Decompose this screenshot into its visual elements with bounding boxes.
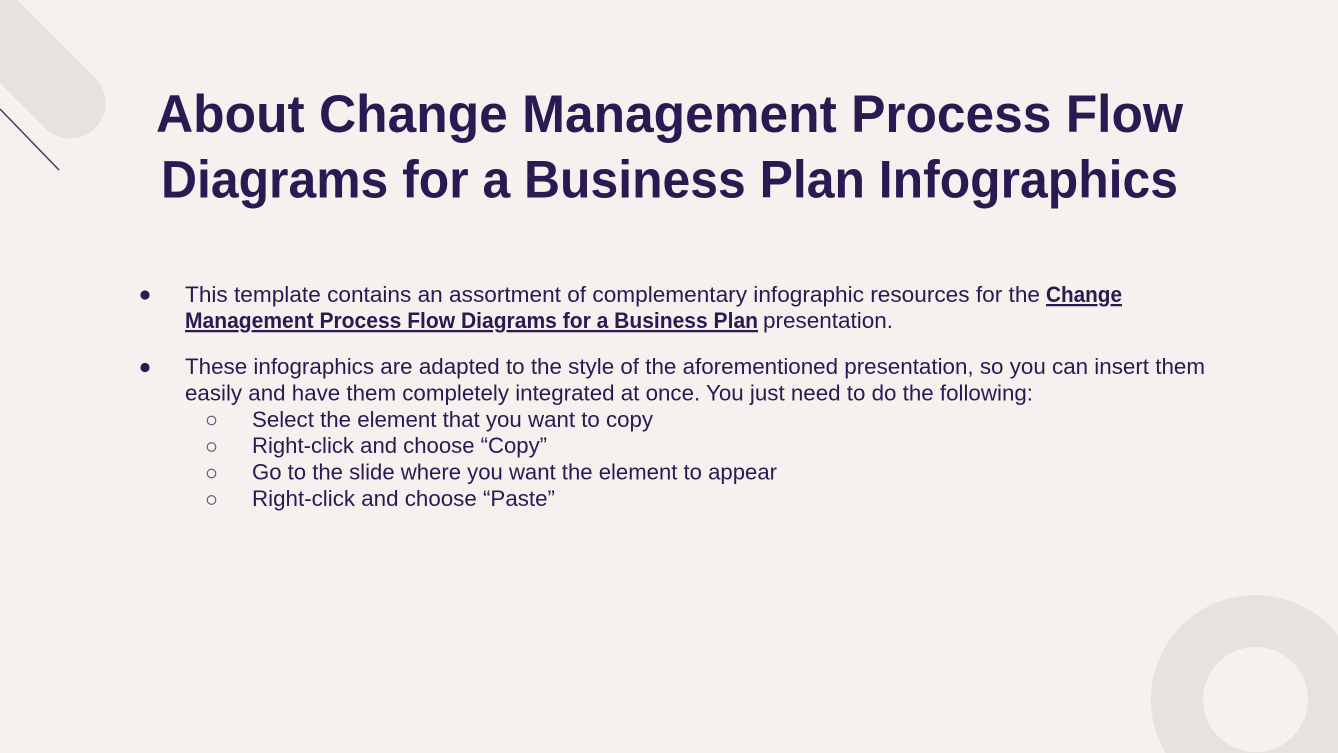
- title: [156, 85, 1184, 210]
- list item: select element: Select the element that you want to copy: [252, 407, 654, 432]
- text block: second bullet: easily and have them completely integrated at once. You just need to do the following:: [185, 380, 1033, 406]
- text block: first bullet: Management Process Flow Diagrams for a Business Plan: [185, 308, 758, 333]
- text block: second bullet: [140, 354, 1205, 406]
- text block: first bullet: [140, 282, 1122, 333]
- list item: copy: Right-click and choose “Copy”: [252, 433, 547, 458]
- decoration: thin diagonal line: [0, 109, 59, 170]
- list item: paste: Right-click and choose “Paste”: [252, 486, 555, 511]
- text block: first bullet: This template contains an assortment of complementary infographic resources for the: [185, 282, 1040, 307]
- title: Diagrams for a Business Plan Infographics: [161, 150, 1178, 210]
- text block: second bullet: These infographics are adapted to the style of the aforementioned presentation, so you can insert them: [185, 354, 1205, 379]
- title: About Change Management Process Flow: [156, 85, 1184, 144]
- list item: go to slide: Go to the slide where you want the element to appear: [252, 460, 777, 484]
- decoration: ring bottom right: [1177, 621, 1334, 753]
- text block: first bullet: Change: [1046, 282, 1122, 307]
- text block: first bullet: presentation.: [763, 308, 893, 333]
- decoration: diagonal capsule top left: [0, 0, 70, 103]
